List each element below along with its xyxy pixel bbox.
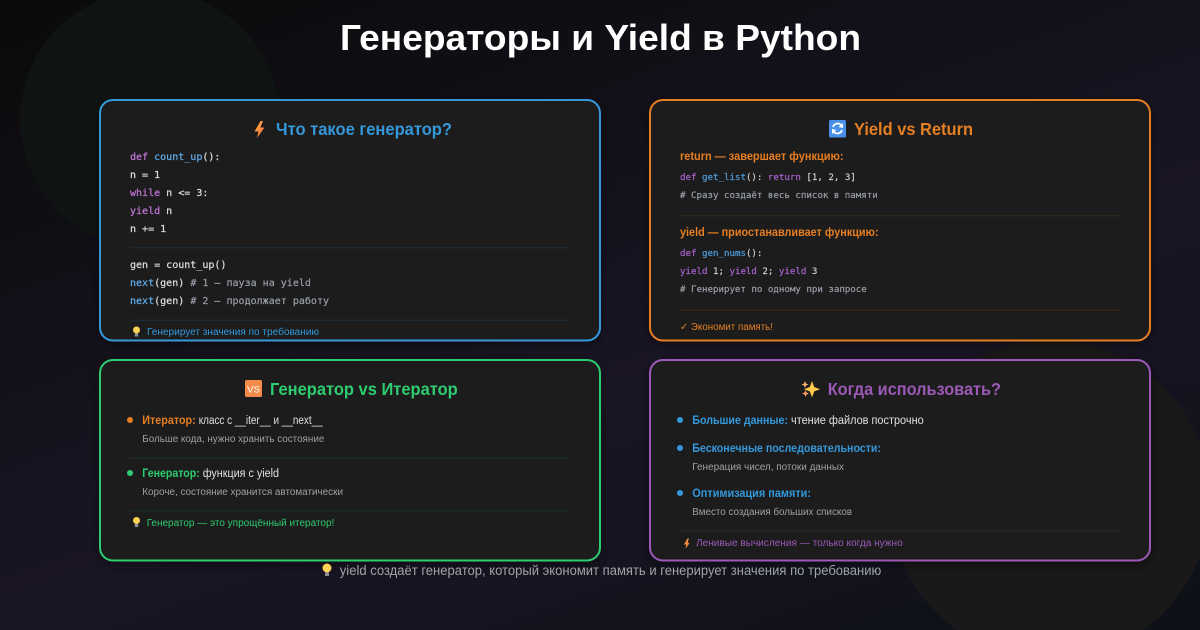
icon: refresh arrows [829, 120, 846, 138]
code block: function definition: def count_up(): [130, 152, 220, 163]
return code: # Сразу создаёт весь список в памяти [680, 191, 878, 201]
icon: lightning bolt [254, 121, 264, 138]
item: big data: Большие данные: [692, 415, 788, 427]
yield code: # Генерирует по одному при запросе [680, 285, 867, 295]
footer text: yield создаёт генератор, который экономит память и генерирует значения по требованию [340, 563, 881, 578]
generator item: функция с yield [203, 468, 279, 480]
note: Генерирует значения по требованию [147, 326, 319, 338]
icon: lightning bolt [684, 538, 690, 549]
heading: Когда использовать? [828, 379, 1001, 399]
item: infinite sequences: Генерация чисел, потоки данных [692, 462, 844, 473]
item: big data [677, 415, 924, 427]
title: Генераторы и Yield в Python [340, 17, 861, 58]
code block: function definition [130, 152, 220, 235]
code block: function definition: while n <= 3: [130, 188, 208, 199]
generator item [127, 468, 343, 498]
card background [650, 100, 1150, 340]
code block: usage: next(gen) # 1 — пауза на yield [130, 278, 311, 289]
panel: when to use [650, 360, 1150, 560]
heading: Генератор vs Итератор [270, 379, 458, 399]
icon: light bulb [322, 564, 332, 576]
item: infinite sequences: Бесконечные последовательности: [692, 443, 881, 455]
code block: usage: gen = count_up() [130, 260, 226, 271]
item: big data: чтение файлов построчно [791, 415, 924, 427]
iterator item: Итератор: [142, 415, 196, 427]
iterator item: класс с __iter__ и __next__ [199, 415, 323, 427]
item: memory optimisation: Вместо создания больших списков [692, 506, 852, 518]
code block: usage: next(gen) # 2 — продолжает работу [130, 295, 329, 307]
code block: usage [130, 260, 329, 307]
item: memory optimisation [677, 488, 852, 518]
note: Ленивые вычисления — только когда нужно [696, 538, 903, 549]
footer takeaway [322, 563, 881, 578]
yield code: def gen_nums(): [680, 249, 762, 259]
panel: what is a generator [100, 100, 600, 340]
icon: light bulb [133, 517, 140, 527]
heading: Что такое генератор? [276, 119, 452, 139]
icon: VS badge [245, 380, 262, 397]
code block: function definition: yield n [130, 206, 172, 217]
item: infinite sequences [677, 443, 881, 473]
iterator item [127, 415, 325, 445]
yield code: yield 1; yield 2; yield 3 [680, 267, 817, 277]
card background [100, 360, 600, 560]
card background [650, 360, 1150, 560]
code block: function definition: n = 1 [130, 170, 160, 181]
generator item: Генератор: [142, 468, 200, 480]
note: ✓ Экономит память! [680, 322, 773, 333]
iterator item: Больше кода, нужно хранить состояние [142, 434, 325, 445]
note: Генератор — это упрощённый итератор! [147, 518, 334, 529]
panel: generator vs iterator [100, 360, 600, 560]
yield code [680, 249, 867, 295]
item: memory optimisation: Оптимизация памяти: [692, 488, 811, 500]
card background [100, 100, 600, 340]
panel: yield vs return [650, 100, 1150, 340]
icon: light bulb [133, 326, 140, 336]
yield subheading: yield — приостанавливает функцию: [680, 227, 878, 239]
generator item: Короче, состояние хранится автоматически [142, 487, 343, 498]
return subheading: return — завершает функцию: [680, 151, 844, 163]
icon: sparkles [802, 381, 820, 397]
code block: function definition: n += 1 [130, 224, 166, 235]
icon: VS badge: VS [247, 384, 260, 396]
return code [680, 173, 878, 201]
heading: Yield vs Return [854, 119, 973, 139]
return code: def get_list(): return [1, 2, 3] [680, 173, 856, 183]
